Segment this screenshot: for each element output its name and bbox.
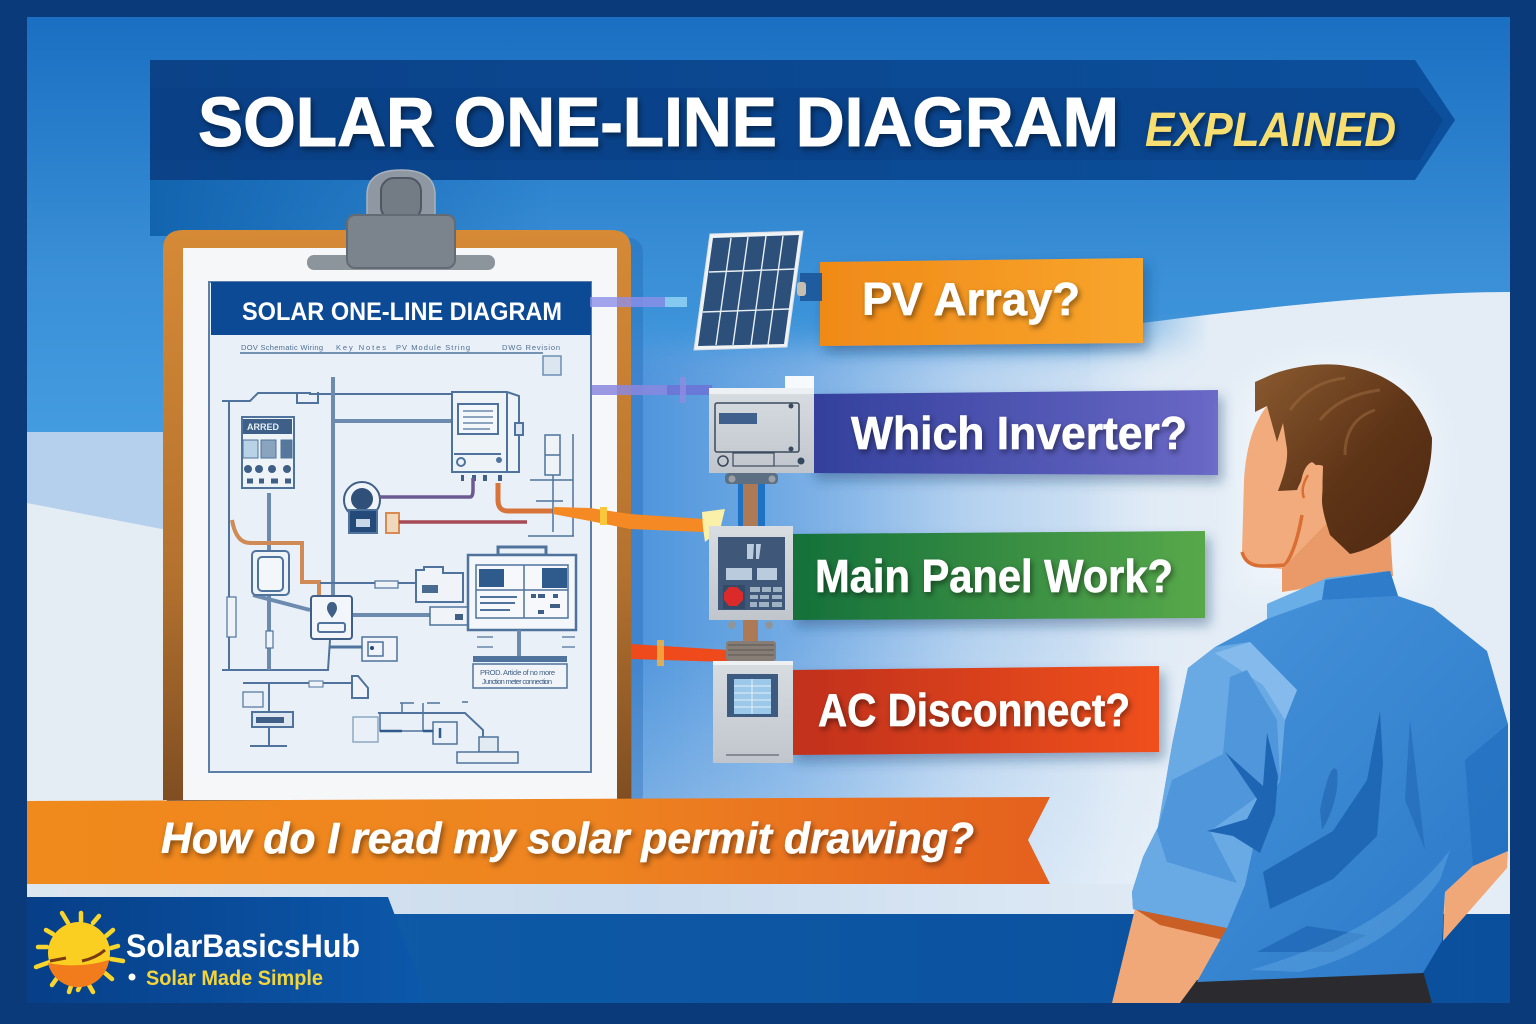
- monitor drawing: Junction meter connection: [482, 677, 552, 686]
- main title: SOLAR ONE-LINE DIAGRAM: [198, 83, 1119, 161]
- right forearm: [1443, 851, 1508, 941]
- spark: junction glow: [702, 509, 725, 542]
- meter drawing: [344, 482, 380, 533]
- icon: solar panel: [694, 231, 822, 350]
- title banner: [150, 60, 1455, 180]
- sleeve highlight: [1132, 642, 1297, 928]
- shirt: [1132, 571, 1508, 982]
- clipboard board: [163, 230, 631, 800]
- coloured wires on drawing: [380, 478, 473, 497]
- wire to main panel: [553, 507, 704, 532]
- top feeder line: [222, 392, 452, 670]
- sleeve mid tone: [1157, 670, 1280, 883]
- sheet caption row: [240, 343, 561, 375]
- brand name: SolarBasicsHub: [126, 928, 360, 964]
- sheet caption row: Key Notes: [336, 343, 386, 352]
- sheet header: SOLAR ONE-LINE DIAGRAM: [242, 298, 562, 326]
- bottom question banner: How do I read my solar permit drawing?: [161, 814, 974, 863]
- drawing sheet: [209, 282, 591, 772]
- blueprint schematic: [222, 377, 576, 763]
- left arm: [1112, 909, 1227, 1003]
- inverter drawing: [452, 392, 523, 478]
- halo: [1240, 360, 1436, 590]
- label: AC Disconnect: [790, 666, 1159, 755]
- label: Which Inverter: [810, 390, 1218, 475]
- sheet caption row: DOV Schematic Wiring: [241, 343, 323, 352]
- connector wires from sheet to components: [553, 297, 728, 666]
- left control panel: ARRED: [247, 422, 280, 432]
- wire to inverter: [592, 377, 712, 403]
- hair strands: [1290, 378, 1380, 455]
- label: Which Inverter: Which Inverter?: [851, 407, 1187, 459]
- label: Main Panel Work: [790, 531, 1205, 620]
- sub-panel drawings: [330, 567, 468, 661]
- wire to PV array: [590, 297, 687, 307]
- connector: main panel to disconnect: [726, 618, 776, 661]
- paper: [183, 248, 617, 800]
- person from behind: [1112, 360, 1508, 1003]
- monitor drawing: PROD. Article of no more: [480, 668, 555, 677]
- shirt shadow folds: [1207, 733, 1278, 853]
- label: PV Array: [820, 258, 1143, 346]
- title accent word: EXPLAINED: [1145, 104, 1396, 157]
- right small unit: [528, 434, 574, 536]
- collar: [1267, 571, 1398, 619]
- clip: [307, 170, 495, 270]
- shoulder highlight: [1215, 642, 1297, 720]
- label: Main Panel Work: Main Panel Work?: [815, 550, 1173, 602]
- combiner box drawings: [227, 551, 415, 648]
- bottom question banner: [27, 797, 1050, 884]
- sheet caption row: PV Module String: [396, 343, 470, 352]
- icon: sun logo: [36, 913, 123, 992]
- lower-left schematic: [243, 676, 368, 747]
- hair: [1255, 364, 1432, 554]
- trousers: [1180, 971, 1432, 1003]
- label: AC Disconnect: AC Disconnect?: [818, 684, 1130, 736]
- monitor drawing: [468, 547, 576, 688]
- tagline: Solar Made Simple: [146, 967, 323, 990]
- ear: [1300, 462, 1323, 512]
- neck and face: [1242, 400, 1393, 592]
- wire to AC disconnect: [632, 640, 728, 666]
- icon: main panel: [709, 526, 793, 620]
- main bus: [253, 377, 452, 670]
- connector: inverter to main panel: [725, 470, 778, 530]
- lower-right schematic: [353, 702, 518, 763]
- sheet header: [211, 282, 591, 335]
- logo block: [27, 897, 428, 1003]
- clipboard: [163, 170, 643, 808]
- icon: inverter: [709, 376, 814, 473]
- sheet caption row: DWG Revision: [502, 343, 560, 352]
- icon: AC disconnect: [713, 661, 793, 763]
- label: PV Array: PV Array?: [862, 273, 1080, 325]
- left control panel: [242, 417, 294, 488]
